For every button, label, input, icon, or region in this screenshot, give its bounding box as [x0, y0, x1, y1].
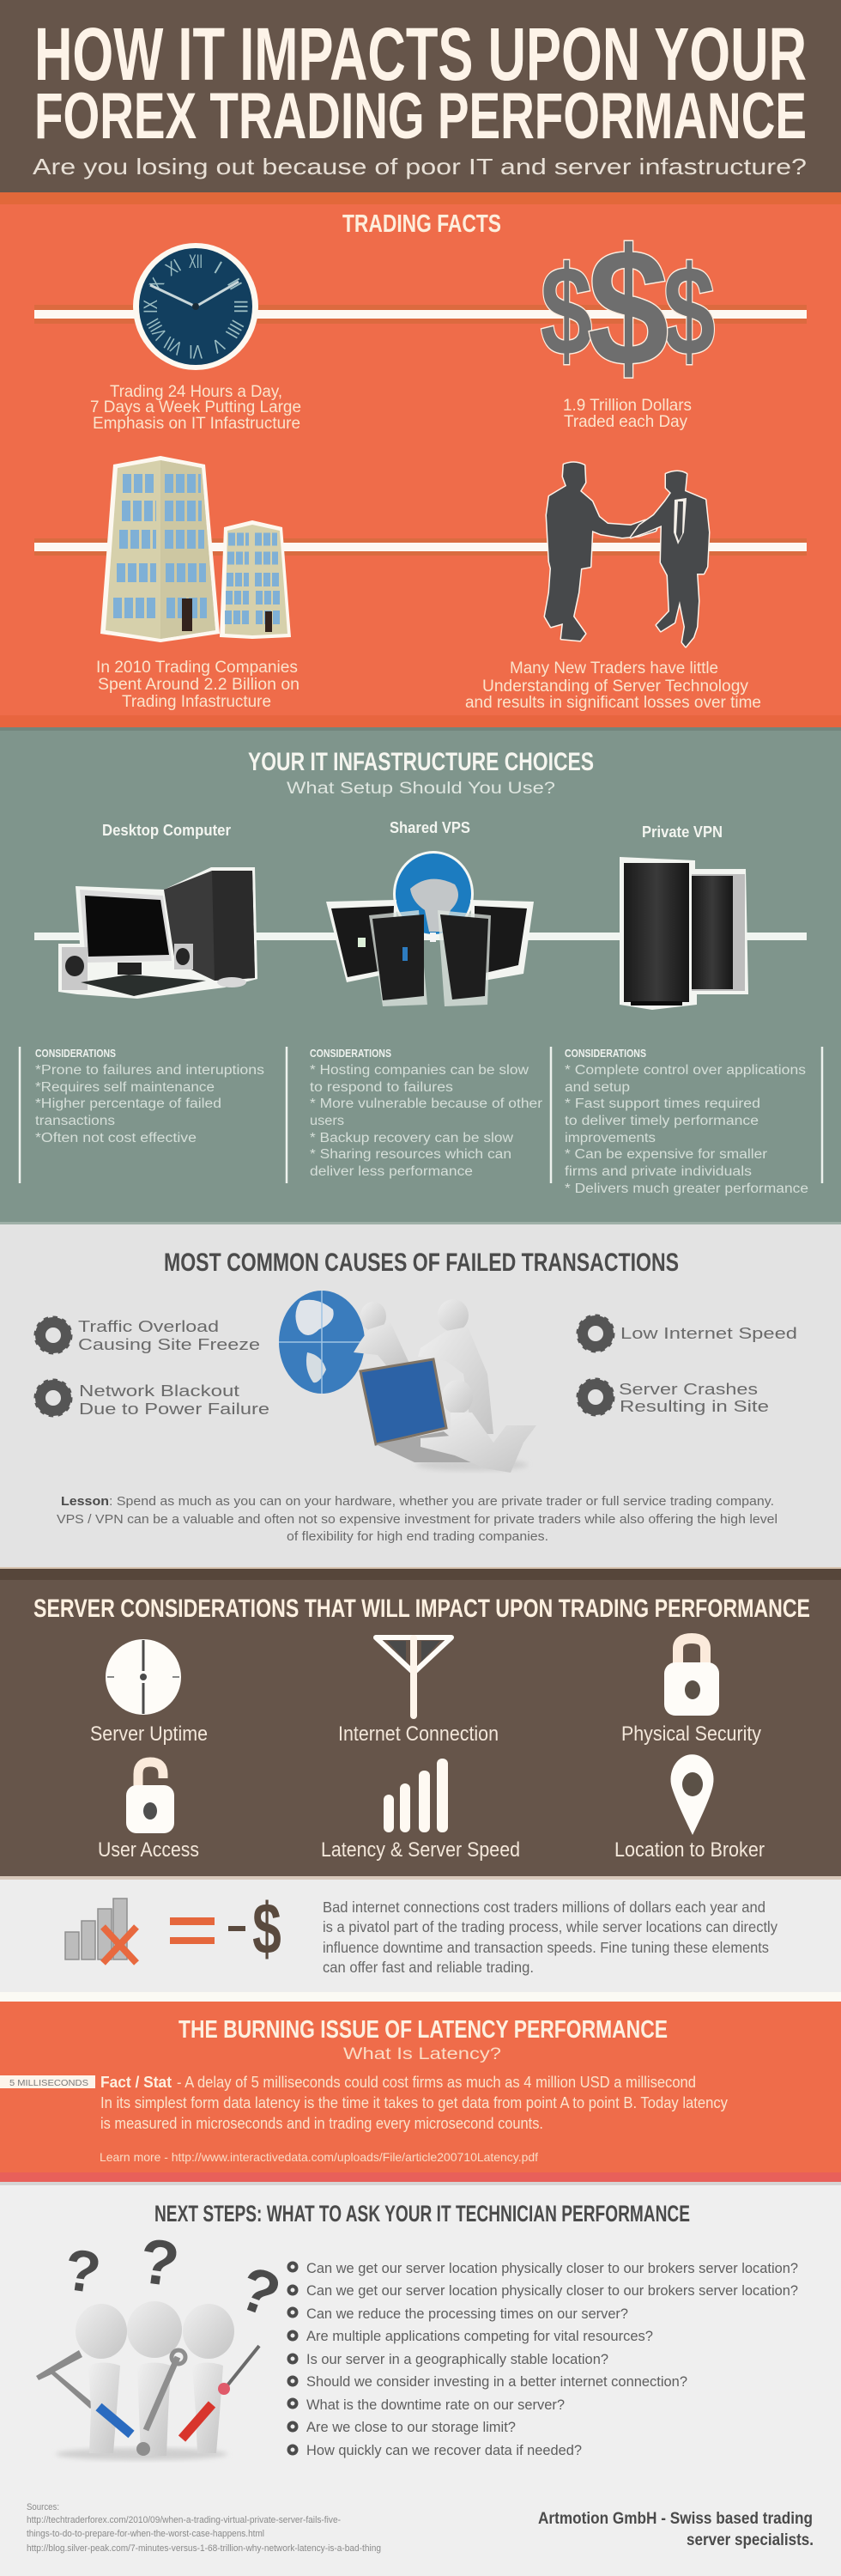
column: vpn considerations: * Delivers much greater performance [565, 1182, 808, 1196]
illustration: figures with tools: ? [230, 2253, 289, 2331]
text: new traders: Understanding of Server Technology [482, 677, 748, 696]
column: desktop considerations: *Often not cost effective [35, 1131, 197, 1145]
text: 1.9 trillion dollars: 1.9 Trillion Dollars [563, 397, 692, 415]
divider lines [20, 1047, 822, 1183]
icon: handshake silhouettes [545, 463, 709, 647]
text: company credit [538, 2510, 814, 2549]
column: desktop considerations: *Requires self maintenance [35, 1080, 215, 1095]
label: location to broker: Location to Broker [614, 1838, 765, 1862]
cause: server crashes: Server Crashes [619, 1380, 758, 1398]
text: lesson: : Spend as much as you can on your hardware, whether you are private trader or full service trading company. [109, 1494, 774, 1509]
column: desktop considerations: *Prone to failures and interuptions [35, 1063, 264, 1078]
cause: traffic overload: Causing Site Freeze [78, 1335, 260, 1353]
text: new traders [465, 659, 761, 712]
cause: traffic overload: Traffic Overload [78, 1317, 219, 1335]
text: fact stat: Fact / Stat [100, 2074, 172, 2091]
column: vps considerations: users [310, 1114, 344, 1128]
subtitle: Are you losing out because of poor IT and server infastructure? [33, 154, 807, 179]
icon: wall clock: V [209, 334, 228, 357]
column: desktop considerations: transactions [35, 1114, 115, 1128]
illustration: figures with tools: ? [135, 2225, 184, 2300]
question list: Are multiple applications competing for vital resources? [306, 2328, 653, 2344]
column: vpn considerations: to deliver timely performance [565, 1114, 759, 1128]
icon: wall clock: III [230, 300, 251, 313]
icon: shared vps [326, 851, 534, 1006]
text: cost explanation: Bad internet connections cost traders millions of dollars each year and [323, 1899, 765, 1916]
text: 1.9 trillion dollars [563, 397, 692, 431]
text: fact stat: - A delay of 5 milliseconds could cost firms as much as 4 million USD a millisecond [177, 2074, 696, 2091]
text: lesson [57, 1494, 777, 1544]
question list: Can we reduce the processing times on our server? [306, 2306, 628, 2322]
text: trading 24 hours [90, 383, 301, 433]
text: lesson: of flexibility for high end trading companies. [287, 1529, 548, 1544]
subheading: what is latency: What Is Latency? [343, 2045, 501, 2063]
subheading: What Setup Should You Use? [287, 780, 555, 798]
text: cost explanation [323, 1899, 777, 1976]
label: server uptime: Server Uptime [90, 1722, 208, 1746]
cause: network blackout: Due to Power Failure [79, 1400, 269, 1418]
column: vps considerations: * More vulnerable because of other [310, 1097, 542, 1111]
question list [288, 2260, 798, 2458]
illustration: globe, laptop and figures [279, 1291, 536, 1473]
icon: wall clock: XI [162, 255, 185, 280]
text: sources: Sources: [27, 2502, 59, 2512]
label: desktop computer: Desktop Computer [102, 822, 231, 839]
text: new traders: and results in significant losses over time [465, 694, 761, 712]
text: 1.9 trillion dollars: Traded each Day [564, 413, 687, 431]
cause: traffic overload [78, 1317, 260, 1353]
panel: trading facts [0, 192, 841, 727]
icon: wall clock: I [210, 257, 226, 278]
column: vpn considerations: * Can be expensive for smaller [565, 1147, 767, 1162]
text: learn more link: Learn more - http://www.interactivedata.com/uploads/File/article200710Latency.pdf [100, 2150, 538, 2164]
icon: user access unlocked [126, 1762, 174, 1833]
question list: Are we close to our storage limit? [306, 2419, 516, 2435]
text: trading 24 hours: Emphasis on IT Infastructure [93, 415, 300, 433]
icon: dollar signs: $ [588, 215, 669, 400]
icon: dollar signs: $ [663, 240, 715, 382]
icon: wall clock: IX [140, 300, 161, 313]
column: vpn considerations: and setup [565, 1080, 630, 1095]
question list: Should we consider investing in a better internet connection? [306, 2373, 687, 2390]
text: trading 24 hours: 7 Days a Week Putting Large [90, 398, 301, 416]
text: company credit: server specialists. [687, 2531, 814, 2549]
panel: latency [0, 1992, 841, 2182]
icon: private vpn racks [620, 857, 748, 1010]
illustration: figures with tools [36, 2225, 289, 2460]
column: vps considerations: to respond to failures [310, 1080, 453, 1095]
icon: minus dollar [228, 1888, 281, 1969]
label: private vpn: Private VPN [642, 823, 723, 841]
text: cost explanation: can offer fast and reliable trading. [323, 1959, 534, 1976]
illustration: figures with tools: ? [60, 2237, 105, 2306]
label: shared vps: Shared VPS [390, 819, 470, 836]
question list: How quickly can we recover data if needed? [306, 2442, 582, 2458]
text: fact stat [100, 2074, 728, 2132]
icon: office buildings [100, 456, 291, 642]
text: sources [27, 2502, 381, 2554]
question list: What is the downtime rate on our server? [306, 2397, 565, 2413]
heading: failed transactions: MOST COMMON CAUSES OF FAILED TRANSACTIONS [164, 1249, 679, 1277]
cause: server crashes: Resulting in Site [620, 1397, 769, 1415]
text: 2010 spending [96, 659, 299, 711]
icon: latency signal bars [384, 1759, 448, 1832]
column: vps considerations: * Sharing resources which can [310, 1147, 511, 1162]
icon: wall clock: VII [160, 332, 186, 359]
tag: 5 milliseconds: 5 MILLISECONDS [9, 2079, 88, 2088]
text: 2010 spending: Spent Around 2.2 Billion on [98, 676, 299, 694]
icon: gear 2 [36, 1381, 70, 1415]
icon: wall clock [133, 243, 258, 370]
icon: location pin [671, 1754, 714, 1835]
icon: dollar signs: $ [541, 240, 592, 382]
text: trading 24 hours: Trading 24 Hours a Day, [110, 383, 282, 401]
column: vpn considerations: firms and private individuals [565, 1164, 752, 1179]
column: vpn considerations: improvements [565, 1131, 656, 1145]
cause: low internet speed: Low Internet Speed [620, 1324, 797, 1342]
icon: gear 3 [578, 1316, 613, 1351]
text: 2010 spending: In 2010 Trading Companies [96, 659, 298, 677]
icon: wall clock: IIII [221, 316, 248, 342]
cause: server crashes [619, 1380, 769, 1415]
column: desktop considerations: CONSIDERATIONS [35, 1047, 116, 1060]
cause: network blackout [79, 1382, 269, 1418]
text: fact stat: In its simplest form data latency is the time it takes to get data from point A to point B. Today latency [100, 2094, 728, 2111]
icon: server uptime clock [106, 1639, 181, 1715]
icon: dollar signs [541, 215, 715, 400]
icon: minus dollar: $ [252, 1888, 281, 1969]
text: new traders: Many New Traders have little [510, 659, 718, 677]
text: fact stat: is measured in microseconds and in trading every microsecond counts. [100, 2115, 543, 2132]
panel: IT infrastructure choices [0, 727, 841, 1222]
column: vps considerations [310, 1047, 542, 1179]
icon: internet antenna [376, 1637, 451, 1716]
icon: wall clock: VIII [142, 315, 171, 343]
heading: latency: THE BURNING ISSUE OF LATENCY PERFORMANCE [178, 2016, 668, 2044]
text: lesson: Lesson [61, 1494, 109, 1509]
icon: physical security lock [664, 1638, 719, 1716]
icon: wall clock: II [223, 275, 246, 294]
question list: Is our server in a geographically stable location? [306, 2351, 608, 2367]
panel: server considerations [0, 1567, 841, 1880]
icon: wall clock: XII [189, 251, 203, 272]
text: sources: http://techtraderforex.com/2010/09/when-a-trading-virtual-private-server-fails-five- [27, 2515, 341, 2525]
heading: infrastructure choices: YOUR IT INFASTRUCTURE CHOICES [248, 748, 594, 776]
label: physical security: Physical Security [621, 1722, 761, 1746]
column: vpn considerations: CONSIDERATIONS [565, 1047, 646, 1060]
column: desktop considerations: *Higher percentage of failed [35, 1097, 221, 1111]
icon: gear 4 [578, 1380, 613, 1414]
question list: Can we get our server location physically closer to our brokers server location? [306, 2260, 798, 2276]
text: sources: http://blog.silver-peak.com/7-minutes-versus-1-68-trillion-why-network-latency-is-a-bad-thing [27, 2543, 381, 2554]
text: 2010 spending: Trading Infastructure [122, 693, 271, 711]
panel: cost callout [0, 1880, 841, 1992]
icon: wall clock: VI [189, 341, 203, 362]
cause: network blackout: Network Blackout [79, 1382, 239, 1400]
label: user access: User Access [98, 1838, 199, 1862]
heading: trading facts: TRADING FACTS [342, 210, 501, 238]
icon: desktop computer [58, 867, 257, 999]
text: sources: things-to-do-to-prepare-for-when-the-worst-case-happens.html [27, 2529, 264, 2539]
text: cost explanation: is a pivatol part of the trading process, while server locations can directly [323, 1918, 777, 1935]
column: vpn considerations: * Complete control over applications [565, 1063, 806, 1078]
column: vpn considerations [565, 1047, 808, 1196]
label: latency and server speed: Latency & Server Speed [321, 1838, 520, 1862]
column: vps considerations: CONSIDERATIONS [310, 1047, 391, 1060]
icon: gear 1 [36, 1318, 70, 1352]
icon: failing bar chart [65, 1899, 136, 1963]
text: company credit: Artmotion GmbH - Swiss based trading [538, 2510, 813, 2528]
panel: next steps [0, 2182, 841, 2576]
column: vps considerations: * Hosting companies can be slow [310, 1063, 529, 1078]
column: vps considerations: deliver less performance [310, 1164, 473, 1179]
text: lesson: VPS / VPN can be a valuable and often not so expensive investment for private traders while also offering the high level [57, 1512, 777, 1527]
column: vps considerations: * Backup recovery can be slow [310, 1131, 514, 1145]
question list: Can we get our server location physically closer to our brokers server location? [306, 2282, 798, 2299]
panel: failed transactions [0, 1222, 841, 1568]
icon: equals sign [170, 1917, 215, 1944]
text: cost explanation: influence downtime and transaction speeds. Fine tuning these elements [323, 1939, 769, 1956]
column: vpn considerations: * Fast support times required [565, 1097, 760, 1111]
tag: 5 milliseconds [0, 2075, 95, 2088]
icon: wall clock: X [145, 274, 168, 294]
label: internet connection: Internet Connection [338, 1722, 499, 1746]
column: desktop considerations [35, 1047, 264, 1145]
panel: header [0, 0, 841, 192]
